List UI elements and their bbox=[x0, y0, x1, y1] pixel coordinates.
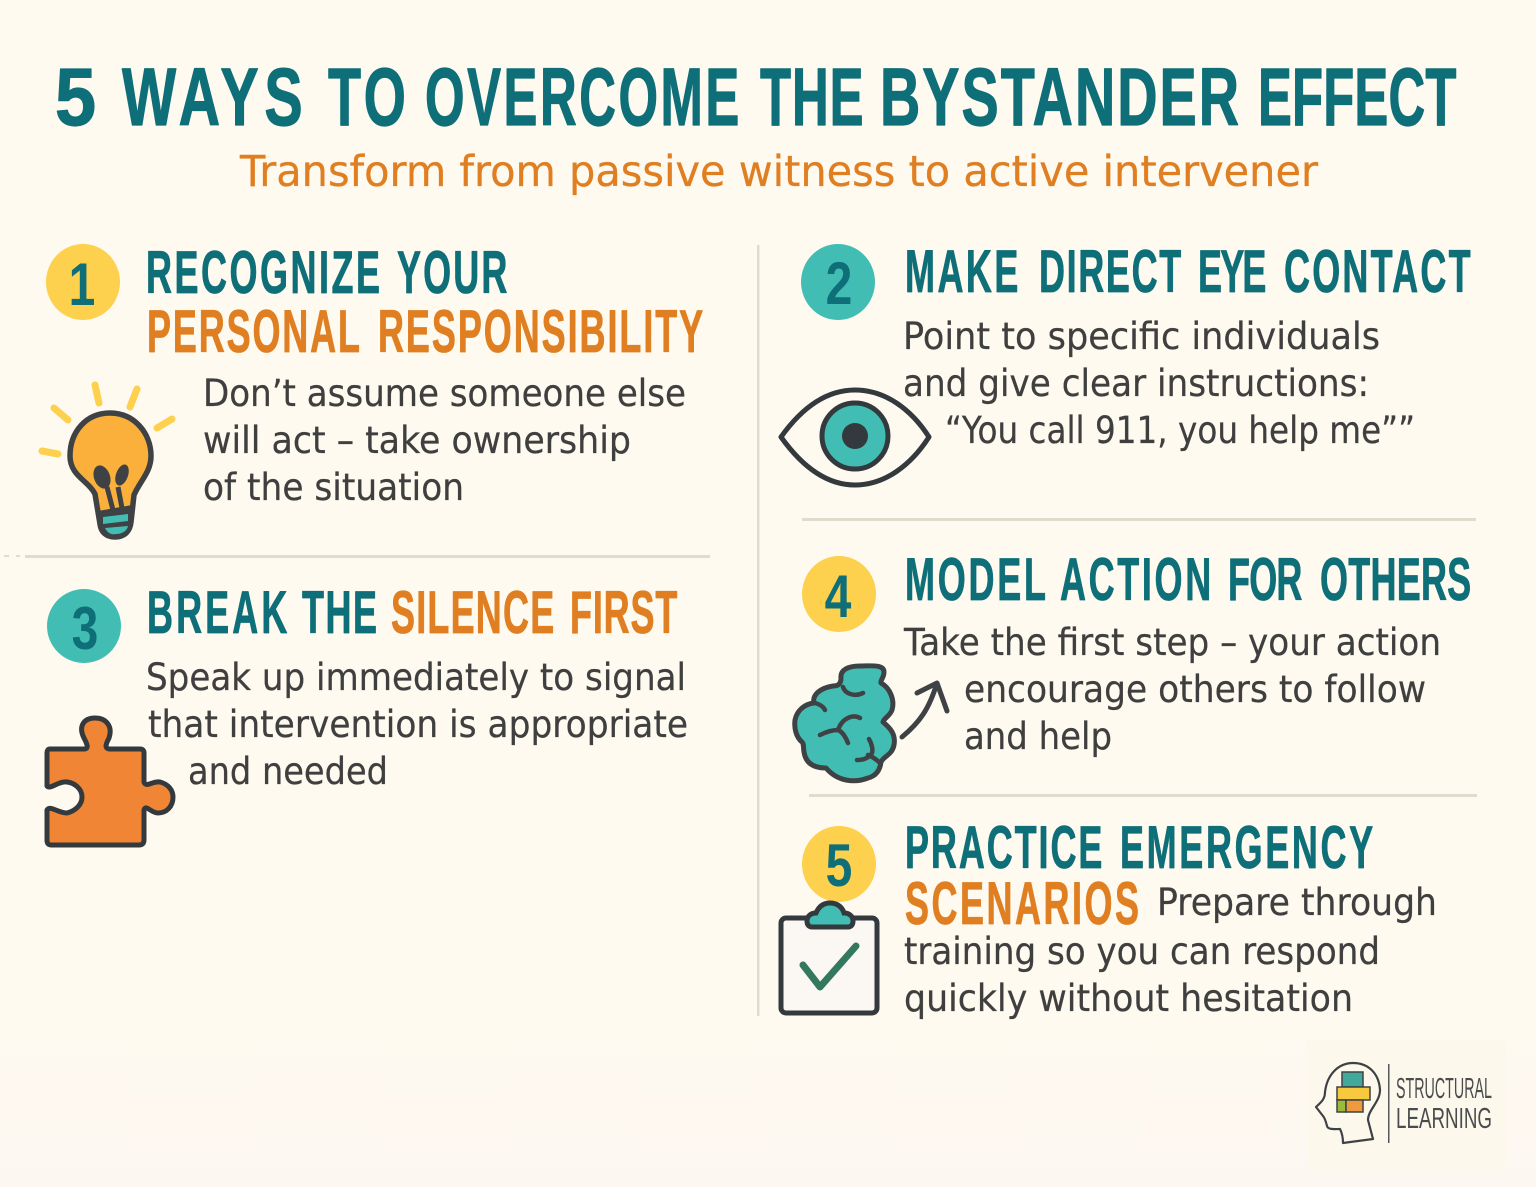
arrow bbox=[902, 683, 947, 737]
heading: practice emergency scenarios: EMERGENCY bbox=[1120, 815, 1373, 881]
heading: practice emergency scenarios bbox=[905, 815, 1373, 937]
icon: head with blocks bbox=[1316, 1063, 1380, 1143]
heading: practice emergency scenarios: PRACTICE bbox=[905, 815, 1102, 881]
heading: model action for others bbox=[905, 547, 1471, 613]
logo: structural learning bbox=[1307, 1040, 1506, 1170]
icon: clipboard bbox=[781, 903, 877, 1013]
panel: step 3 bbox=[47, 580, 688, 845]
number badge 4 bbox=[802, 556, 876, 632]
body text: Don’t assume someone else bbox=[203, 372, 686, 415]
body text: and needed bbox=[188, 750, 388, 793]
heading: recognize your personal responsibility: RESPONSIBILITY bbox=[378, 299, 703, 365]
body text: “You call 911, you help me”” bbox=[945, 409, 1415, 452]
number badge 2: 2 bbox=[826, 250, 852, 317]
title: EFFECT bbox=[1258, 52, 1456, 143]
icon: eye bbox=[781, 390, 929, 485]
icon: light bulb bbox=[42, 385, 172, 537]
icon: puzzle piece bbox=[47, 718, 173, 845]
title: BYSTANDER bbox=[880, 51, 1239, 143]
heading: recognize your personal responsibility: YOUR bbox=[397, 240, 507, 306]
title: TO bbox=[328, 51, 406, 143]
number badge 1 bbox=[46, 244, 120, 320]
body text: quickly without hesitation bbox=[904, 977, 1353, 1020]
title bbox=[55, 50, 1456, 143]
body text: Point to specific individuals bbox=[903, 315, 1380, 358]
body text: training so you can respond bbox=[904, 930, 1380, 973]
heading: model action for others: MODEL bbox=[905, 547, 1046, 613]
heading: model action for others: OTHERS bbox=[1320, 547, 1471, 613]
heading: make direct eye contact: DIRECT bbox=[1039, 239, 1181, 305]
body text bbox=[203, 372, 686, 509]
number badge 2 bbox=[801, 244, 875, 320]
number badge 5 bbox=[802, 826, 876, 902]
heading: make direct eye contact: CONTACT bbox=[1284, 239, 1471, 305]
title: OVERCOME bbox=[425, 52, 739, 143]
heading: practice emergency scenarios: SCENARIOS bbox=[905, 871, 1139, 937]
body text: Prepare through bbox=[1157, 881, 1437, 924]
heading: recognize your personal responsibility bbox=[146, 240, 703, 365]
heading: make direct eye contact: MAKE bbox=[905, 239, 1018, 305]
title: 5 bbox=[55, 50, 96, 143]
heading: break the silence first: FIRST bbox=[570, 580, 677, 646]
body text: Take the first step – your action bbox=[903, 621, 1441, 664]
body text: will act – take ownership bbox=[203, 419, 631, 462]
heading: break the silence first: THE bbox=[302, 580, 377, 646]
heading: break the silence first: BREAK bbox=[147, 580, 288, 646]
subtitle: Transform from passive witness to active intervener bbox=[239, 147, 1318, 197]
number badge 3 bbox=[47, 589, 121, 663]
body text bbox=[903, 621, 1441, 758]
body text: that intervention is appropriate bbox=[148, 703, 688, 746]
number badge 1: 1 bbox=[69, 251, 95, 318]
body text bbox=[904, 881, 1437, 1020]
heading: recognize your personal responsibility: PERSONAL bbox=[147, 299, 360, 365]
panel: step 4 bbox=[795, 547, 1471, 781]
heading: break the silence first bbox=[147, 580, 677, 646]
body text bbox=[903, 315, 1415, 452]
body text: encourage others to follow bbox=[964, 668, 1426, 711]
panel: step 2 bbox=[781, 239, 1471, 485]
body text: and give clear instructions: bbox=[903, 362, 1369, 405]
logo text bbox=[1396, 1073, 1492, 1135]
body text bbox=[146, 656, 688, 793]
title: WAYS bbox=[122, 51, 303, 142]
icon: brain bbox=[795, 666, 894, 781]
heading: model action for others: FOR bbox=[1228, 547, 1302, 613]
number badge 4: 4 bbox=[825, 563, 851, 630]
brain folds bbox=[815, 687, 880, 763]
heading: recognize your personal responsibility: RECOGNIZE bbox=[146, 240, 380, 306]
number badge 5: 5 bbox=[826, 832, 852, 899]
panel: step 5 bbox=[781, 815, 1437, 1020]
body text: and help bbox=[964, 715, 1112, 758]
panel: step 1 bbox=[42, 240, 703, 537]
heading: break the silence first: SILENCE bbox=[391, 580, 554, 646]
number badge 3: 3 bbox=[72, 595, 98, 662]
title: THE bbox=[760, 52, 864, 143]
heading: make direct eye contact: EYE bbox=[1198, 239, 1266, 305]
body text: Speak up immediately to signal bbox=[146, 656, 686, 699]
heading: make direct eye contact bbox=[905, 239, 1471, 305]
heading: model action for others: ACTION bbox=[1060, 547, 1211, 613]
body text: of the situation bbox=[203, 466, 464, 509]
